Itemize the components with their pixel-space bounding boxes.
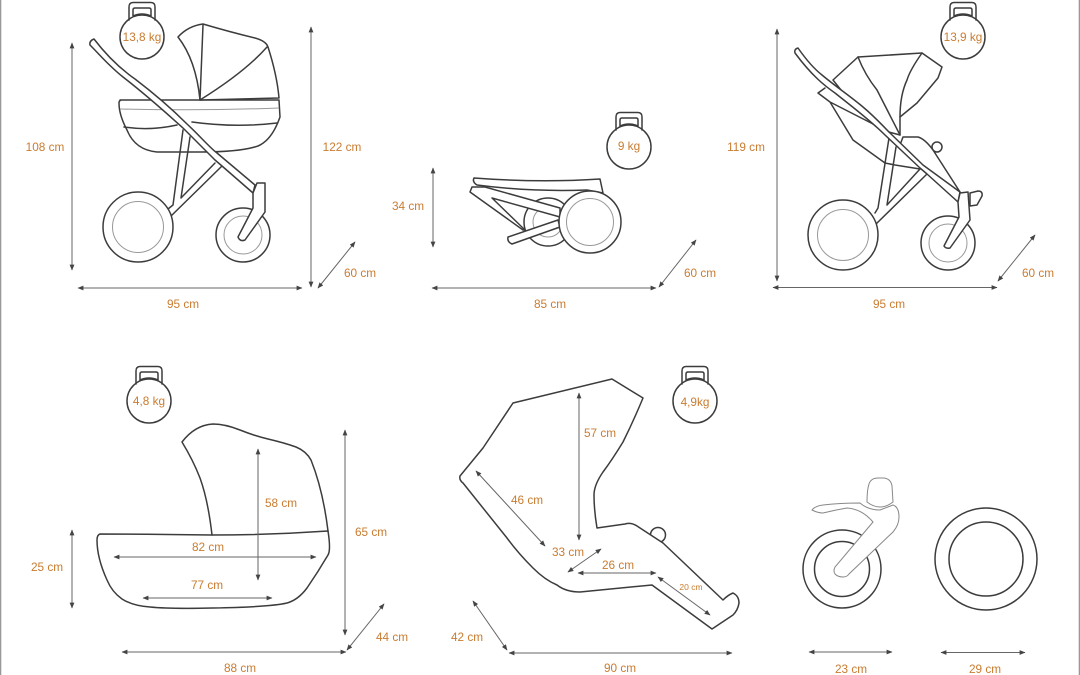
panel: folded stroller bbox=[392, 112, 716, 311]
dimension: 26 cm: 26 cm bbox=[602, 558, 634, 572]
icon: weight 13,8 kg bbox=[120, 2, 164, 59]
dimension: 57 cm: 57 cm bbox=[584, 426, 616, 440]
icon: weight 4,9 kg: 4,9kg bbox=[681, 395, 709, 409]
dimension: 122 cm: 122 cm bbox=[323, 140, 362, 154]
panel: rear wheel bbox=[935, 508, 1037, 675]
dimension: 90 cm: 90 cm bbox=[604, 661, 636, 675]
dimension: 44 cm: 44 cm bbox=[376, 630, 408, 644]
icon: weight 13,9 kg bbox=[941, 2, 985, 59]
dimension: 95 cm: 95 cm bbox=[167, 297, 199, 311]
panel: front wheel bbox=[803, 478, 899, 675]
icon: weight 13,9 kg: 13,9 kg bbox=[944, 30, 982, 44]
dimension: 60 cm: 60 cm bbox=[1022, 266, 1054, 280]
illustration: carrycot bbox=[97, 424, 330, 608]
illustration: pram bbox=[90, 24, 280, 262]
dimension: 25 cm bbox=[31, 530, 72, 608]
dimension: 60 cm bbox=[998, 235, 1054, 281]
dimension: 58 cm: 58 cm bbox=[265, 496, 297, 510]
dimension: 29 cm bbox=[941, 652, 1025, 675]
dimension: 33 cm bbox=[552, 545, 601, 572]
icon: weight 13,8 kg: 13,8 kg bbox=[123, 30, 161, 44]
dimension: 88 cm: 88 cm bbox=[224, 661, 256, 675]
dimension: 42 cm bbox=[451, 601, 507, 650]
panel: pram with carrycot bbox=[26, 2, 376, 311]
icon: weight 4,8 kg bbox=[127, 366, 171, 423]
panel: stroller with seat bbox=[727, 2, 1054, 311]
illustration: front wheel with fork bbox=[803, 478, 899, 608]
icon: weight 4,9 kg bbox=[673, 366, 717, 423]
icon: weight 9 kg: 9 kg bbox=[618, 139, 640, 153]
dimension: 77 cm: 77 cm bbox=[191, 578, 223, 592]
dimension: 60 cm: 60 cm bbox=[684, 266, 716, 280]
dimension: 119 cm: 119 cm bbox=[727, 140, 765, 154]
dimension: 20 cm: 20 cm bbox=[679, 582, 703, 592]
dimension: 44 cm bbox=[347, 604, 408, 650]
dimension: 42 cm: 42 cm bbox=[451, 630, 483, 644]
dimension: 77 cm bbox=[143, 578, 272, 598]
dimension: 82 cm: 82 cm bbox=[192, 540, 224, 554]
illustration: folded frame bbox=[470, 178, 621, 253]
dimension: 33 cm: 33 cm bbox=[552, 545, 584, 559]
dimension: 65 cm: 65 cm bbox=[355, 525, 387, 539]
dimension: 58 cm bbox=[258, 449, 297, 580]
dimension: 34 cm bbox=[392, 168, 433, 247]
illustration: seat bbox=[460, 379, 739, 629]
dimension: 46 cm: 46 cm bbox=[511, 493, 543, 507]
dimension: 60 cm bbox=[659, 240, 716, 287]
illustration: stroller bbox=[795, 48, 982, 270]
dimension: 34 cm: 34 cm bbox=[392, 199, 424, 213]
dimension: 85 cm: 85 cm bbox=[534, 297, 566, 311]
dimension: 25 cm: 25 cm bbox=[31, 560, 63, 574]
dimension: 26 cm bbox=[578, 558, 656, 573]
dimension: 20 cm bbox=[658, 577, 710, 615]
dimension: 46 cm bbox=[476, 471, 545, 546]
dimension: 23 cm bbox=[809, 652, 892, 675]
panel: carrycot bbox=[31, 366, 408, 675]
illustration: rear wheel bbox=[935, 508, 1037, 610]
icon: weight 4,8 kg: 4,8 kg bbox=[133, 394, 165, 408]
dimension: 108 cm: 108 cm bbox=[26, 140, 65, 154]
icon: weight 9 kg bbox=[607, 112, 651, 169]
dimension: 95 cm: 95 cm bbox=[873, 297, 905, 311]
dimension: 60 cm bbox=[318, 242, 376, 288]
panel: seat unit bbox=[451, 366, 739, 675]
dimension: 60 cm: 60 cm bbox=[344, 266, 376, 280]
